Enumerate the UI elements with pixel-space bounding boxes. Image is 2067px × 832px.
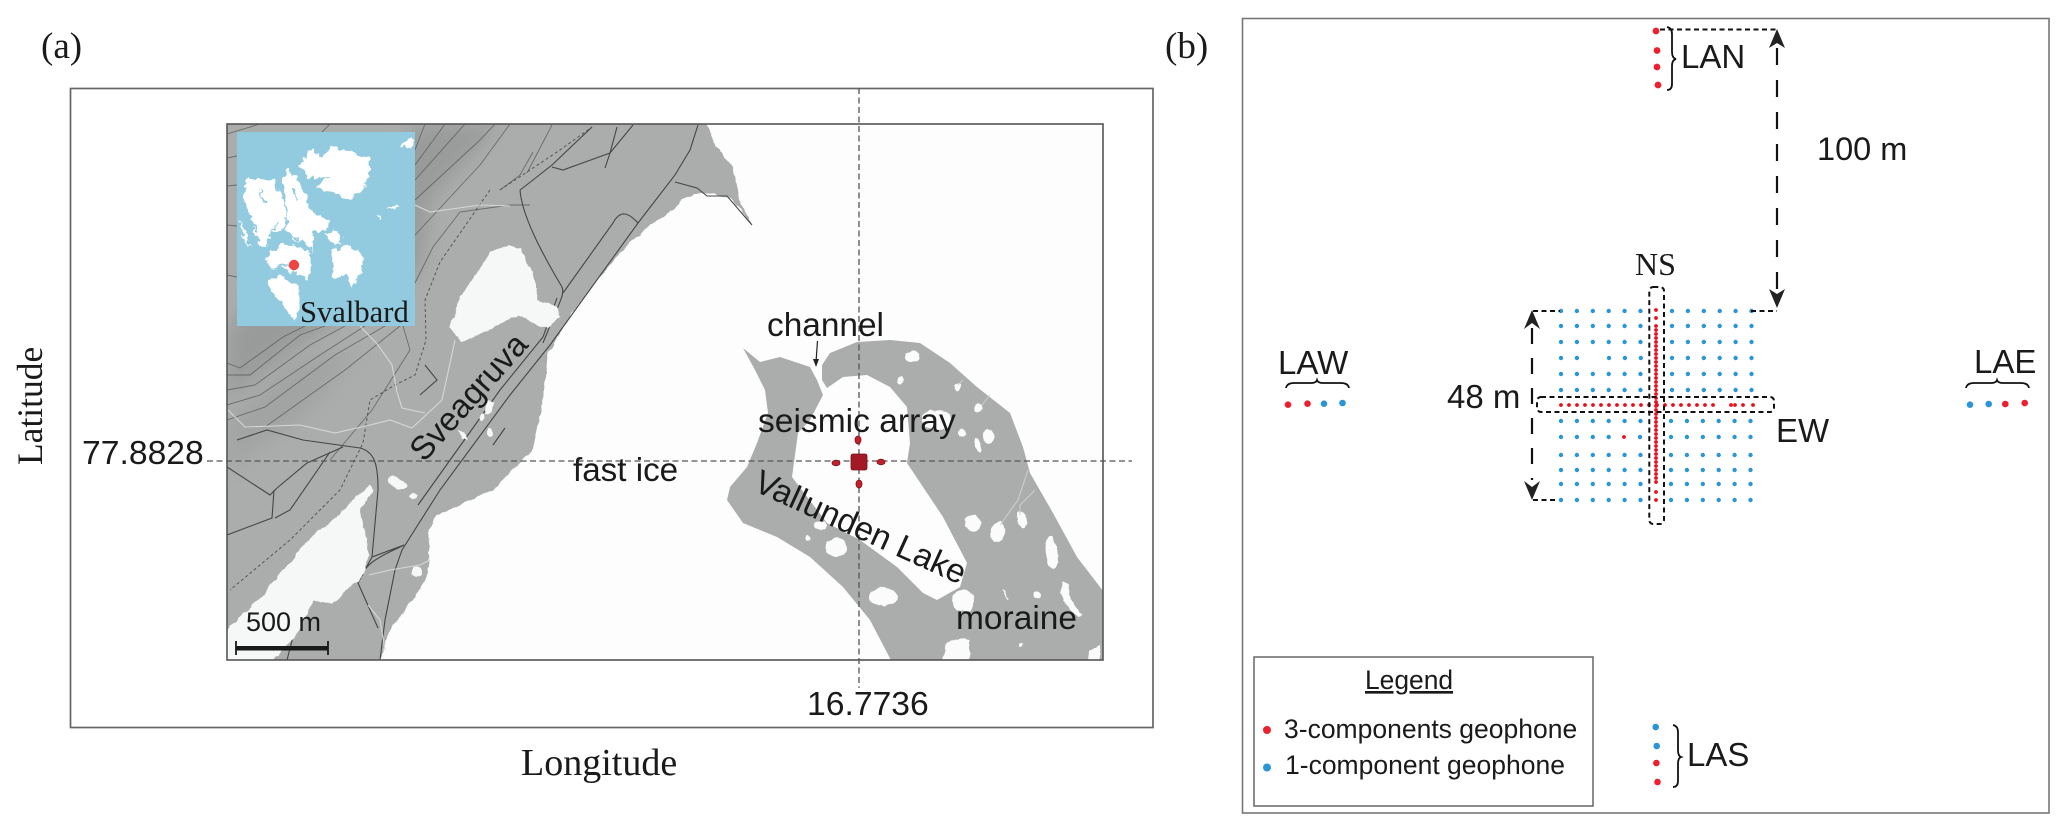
sub-array LAE: [1966, 343, 2036, 408]
land: Vallunden lake surround: [727, 340, 1110, 668]
dimension: 100 m: 100 m: [1817, 131, 1907, 167]
moraine trails: [958, 380, 1035, 525]
tracks: [227, 125, 752, 660]
arrow: channel: [813, 341, 819, 367]
inset: Svalbard locator: [237, 132, 415, 329]
label: fast ice: fast ice: [573, 452, 678, 489]
sub-array LAS: LAS: [1687, 736, 1749, 773]
crosshair latitude: [207, 460, 1132, 462]
scale bar: [236, 607, 328, 655]
axis label: Latitude: Latitude: [10, 347, 50, 465]
panel label (a): (a): [41, 26, 82, 67]
panel b: frame: [1242, 18, 2049, 813]
inset label: Svalbard: [300, 295, 409, 329]
sub-array LAW: [1278, 344, 1349, 408]
array: blue 1-component geophones: [1561, 311, 1752, 500]
sub-array LAW: LAW: [1278, 344, 1349, 381]
panel a: outer frame: [70, 88, 1153, 728]
dimension: 48 m: 48 m: [1447, 378, 1520, 415]
islands: [804, 351, 1100, 665]
terrain shading: [228, 125, 488, 447]
EW dashed box: [1537, 397, 1774, 412]
scale bar: 500 m: [246, 607, 321, 637]
map border: [227, 124, 1103, 660]
label: Sveagruva: Sveagruva: [402, 325, 535, 468]
panel label (b): (b): [1165, 26, 1208, 67]
legend: [1254, 657, 1593, 806]
label: moraine: moraine: [956, 600, 1077, 637]
label: seismic array: seismic array: [758, 403, 956, 440]
dashed paths: [230, 127, 592, 590]
lakes west: [220, 245, 560, 668]
legend: 3-component: 3-components geophone: [1284, 714, 1577, 744]
inset islands: [238, 137, 415, 322]
land: western coast: [220, 116, 752, 668]
inset marker: red dot: [289, 260, 299, 270]
legend: 1-component: 1-component geophone: [1285, 750, 1565, 780]
sub-array LAS: [1652, 724, 1749, 787]
sub-array LAN: LAN: [1681, 38, 1745, 75]
latitude value: 77.8828: [82, 434, 204, 472]
light trails: [228, 205, 510, 650]
contour lines: [227, 124, 552, 460]
array: red 3-component geophones: [1561, 310, 1753, 500]
longitude value: 16.7736: [807, 685, 929, 723]
sub-array LAN: [1653, 27, 1745, 90]
axis label: Longitude: Longitude: [521, 742, 677, 784]
legend title: Legend: [1365, 665, 1453, 695]
label: EW: EW: [1776, 412, 1830, 449]
NS dashed box: [1649, 287, 1664, 524]
dimension: 48 m: [1447, 310, 1560, 500]
label: channel: channel: [767, 307, 884, 344]
sub-array LAE: LAE: [1974, 343, 2036, 380]
icon: seismic array on map: [832, 436, 885, 488]
crosshair longitude: [858, 88, 860, 688]
panel a: map: [220, 116, 1110, 668]
label: Vallunden Lake: Vallunden Lake: [749, 464, 972, 592]
label: NS: NS: [1635, 246, 1676, 282]
dimension: 100 m: [1660, 29, 1907, 311]
